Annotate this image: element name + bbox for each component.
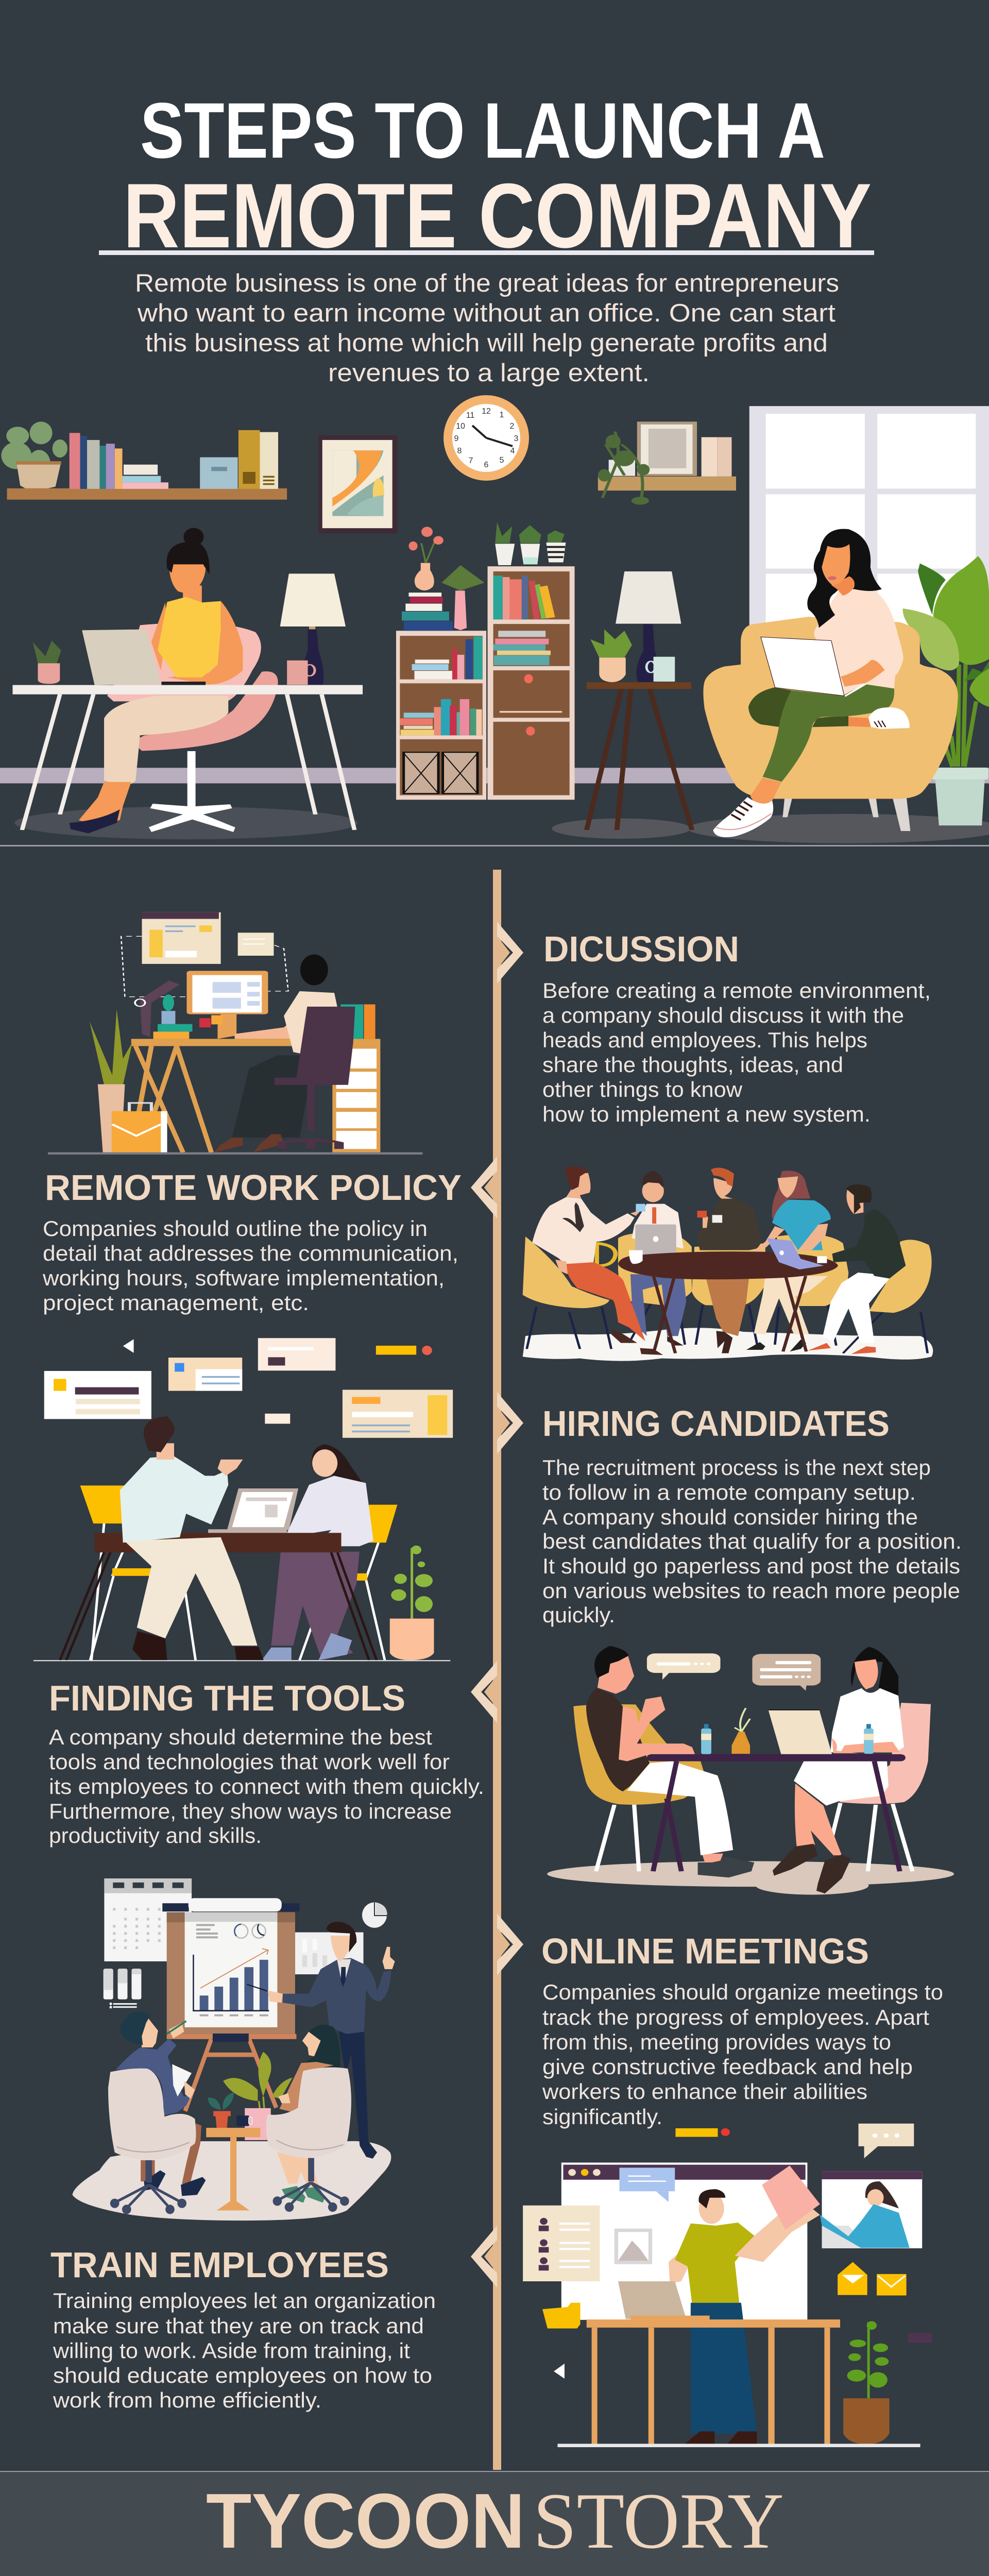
person 5 bbox=[808, 1184, 906, 1354]
desk bbox=[12, 630, 363, 830]
central vertical line bbox=[493, 870, 501, 2470]
illustration: online meeting bbox=[523, 2124, 932, 2447]
video call window bbox=[820, 2171, 922, 2248]
text: dicussion: Before creating a remote environment, bbox=[542, 978, 931, 1003]
text: dicussion: other things to know bbox=[542, 1077, 743, 1101]
bar icons bbox=[104, 1969, 141, 2008]
presenter bbox=[247, 1922, 395, 2159]
intro text: Remote business is one of the great ideas for entrepreneurs bbox=[135, 269, 839, 297]
notification bar bbox=[675, 2128, 730, 2137]
big plant bbox=[902, 556, 989, 825]
arrow icon bbox=[554, 2364, 565, 2379]
illustration: discussion group bbox=[523, 1166, 933, 1361]
woman at desk on chair bbox=[70, 528, 278, 834]
ground line bbox=[557, 2444, 920, 2447]
text: online meetings: from this, meeting provides ways to bbox=[542, 2030, 891, 2054]
clock: 11 bbox=[466, 411, 474, 420]
heading: hiring candidates: HIRING CANDIDATES bbox=[542, 1403, 890, 1444]
text: dicussion bbox=[542, 978, 931, 1126]
man with chair bbox=[573, 1646, 754, 1877]
clock bbox=[444, 395, 529, 481]
text: finding the tools: its employees to connect with them quickly. bbox=[49, 1774, 484, 1799]
intro text bbox=[135, 269, 839, 387]
text: online meetings: track the progress of employees. Apart bbox=[542, 2005, 929, 2029]
pink document bbox=[762, 2165, 820, 2230]
chairs bbox=[108, 2067, 351, 2214]
text: remote work policy: working hours, software implementation, bbox=[42, 1266, 445, 1290]
desk bbox=[587, 2303, 840, 2444]
contact card bbox=[523, 2206, 600, 2281]
chevron: online meetings bbox=[497, 1913, 523, 1975]
clock: 10 bbox=[456, 422, 465, 431]
horizontal divider bbox=[0, 845, 989, 846]
baseboard bbox=[0, 768, 989, 783]
text: dicussion: heads and employees. This helps bbox=[542, 1028, 867, 1052]
chevron: hiring candidates bbox=[497, 1392, 523, 1454]
heading: dicussion: DICUSSION bbox=[543, 929, 739, 969]
person 3 bbox=[696, 1167, 762, 1353]
text: finding the tools: A company should determine the best bbox=[49, 1725, 432, 1749]
man bbox=[120, 1416, 264, 1660]
heading: online meetings: ONLINE MEETINGS bbox=[541, 1931, 869, 1971]
chevron: remote work policy bbox=[471, 1157, 497, 1218]
right shelf with frame bbox=[598, 421, 736, 505]
desk lamp bbox=[280, 573, 346, 684]
illustration: person at desk bbox=[48, 912, 422, 1155]
text: online meetings: Companies should organize meetings to bbox=[542, 1980, 943, 2004]
woman bbox=[262, 1444, 373, 1660]
person 4 bbox=[740, 1171, 831, 1351]
text: hiring candidates: to follow in a remote company setup. bbox=[542, 1480, 916, 1504]
armchair bbox=[703, 617, 958, 831]
text: remote work policy: project management, etc. bbox=[43, 1291, 309, 1315]
plants, mug and table bbox=[206, 2052, 293, 2211]
interview table bbox=[647, 1708, 906, 1871]
envelope icons bbox=[838, 2262, 907, 2295]
standing man bbox=[669, 2189, 820, 2303]
window bbox=[749, 406, 989, 630]
text: finding the tools: Furthermore, they show ways to increase bbox=[49, 1799, 452, 1823]
rug bbox=[73, 2141, 391, 2221]
floor bbox=[547, 1861, 954, 1895]
hero illustration: home office bbox=[0, 406, 989, 843]
bookshelves bbox=[396, 566, 575, 800]
text: hiring candidates: The recruitment process is the next step bbox=[542, 1455, 931, 1480]
intro text: revenues to a large extent. bbox=[328, 359, 650, 387]
floor shadows bbox=[14, 806, 989, 843]
text: train employees: should educate employees on how to bbox=[53, 2363, 432, 2387]
clock: 5 bbox=[500, 456, 504, 465]
illustration: policy meeting with cards bbox=[33, 1338, 453, 1661]
flip chart bbox=[162, 1898, 299, 2111]
intro text: this business at home which will help generate profits and bbox=[145, 329, 828, 357]
chevron: train employees bbox=[471, 2226, 497, 2287]
clock: 8 bbox=[457, 447, 462, 455]
text: train employees: Training employees let an organization bbox=[53, 2289, 436, 2313]
footer band bbox=[0, 2471, 989, 2576]
text: hiring candidates: quickly. bbox=[542, 1603, 615, 1627]
text: remote work policy: Companies should outline the policy in bbox=[43, 1216, 428, 1241]
text: finding the tools: tools and technologies that work well for bbox=[49, 1750, 450, 1774]
illustration: training presentation bbox=[73, 1878, 395, 2221]
yellow chairs bbox=[523, 1233, 932, 1313]
laptop bbox=[618, 2281, 710, 2319]
rug bbox=[523, 1328, 933, 1361]
intro text: who want to earn income without an office. One can start bbox=[137, 299, 835, 327]
yellow folder bbox=[542, 2303, 581, 2329]
side table with lamp and plant bbox=[587, 571, 692, 830]
framed picture bbox=[318, 435, 397, 533]
clock: 3 bbox=[514, 434, 519, 443]
text: dicussion: how to implement a new system. bbox=[542, 1102, 871, 1126]
pie icon bbox=[362, 1902, 387, 1928]
clock: 6 bbox=[484, 461, 489, 469]
chevron: dicussion bbox=[497, 922, 523, 984]
woman with chair bbox=[773, 1647, 931, 1893]
clock: 1 bbox=[500, 411, 504, 419]
text: online meetings: workers to enhance their abilities bbox=[542, 2079, 867, 2104]
heading: remote work policy: REMOTE WORK POLICY bbox=[45, 1167, 462, 1208]
right seated woman bbox=[277, 2025, 340, 2202]
text: hiring candidates: best candidates that qualify for a position. bbox=[542, 1529, 962, 1553]
chair legs bbox=[527, 1303, 928, 1353]
plant bbox=[390, 1546, 434, 1660]
text: hiring candidates bbox=[542, 1455, 962, 1627]
left seated man bbox=[116, 2011, 206, 2196]
clock: 2 bbox=[510, 422, 515, 431]
chevron: finding the tools bbox=[471, 1661, 497, 1723]
illustration: hiring interview bbox=[547, 1646, 954, 1895]
screen window bbox=[561, 2163, 807, 2320]
text: train employees: work from home efficiently. bbox=[53, 2388, 321, 2412]
text: online meetings bbox=[542, 1980, 943, 2129]
left shelf with books and plant bbox=[1, 421, 287, 500]
clock: 4 bbox=[510, 447, 515, 455]
text: finding the tools bbox=[49, 1725, 484, 1848]
text: train employees: make sure that they are on track and bbox=[53, 2314, 424, 2338]
title: STEPS TO LAUNCH A bbox=[140, 87, 825, 175]
clock: 12 bbox=[482, 407, 491, 416]
clock: 7 bbox=[469, 456, 473, 465]
hero: big plant, armchair and seated woman with laptop bbox=[703, 529, 989, 837]
text: hiring candidates: A company should consider hiring the bbox=[542, 1505, 918, 1529]
heading: train employees: TRAIN EMPLOYEES bbox=[50, 2245, 389, 2285]
text: train employees: willing to work. Aside from training, it bbox=[53, 2338, 410, 2363]
title bbox=[99, 87, 874, 267]
text: online meetings: significantly. bbox=[542, 2105, 662, 2129]
text: online meetings: give constructive feedback and help bbox=[542, 2055, 913, 2079]
round table bbox=[618, 1238, 838, 1353]
text: remote work policy bbox=[42, 1216, 458, 1315]
text: hiring candidates: It should go paperless and post the details bbox=[542, 1554, 960, 1578]
footer band: STORY bbox=[533, 2477, 784, 2565]
clock: 9 bbox=[454, 434, 459, 443]
table and laptop bbox=[60, 1488, 377, 1660]
seated woman bbox=[713, 529, 910, 837]
potted plant bbox=[843, 2321, 890, 2444]
speech bubbles bbox=[647, 1653, 821, 1691]
small bar panel bbox=[295, 1933, 364, 1974]
speech bubble bbox=[859, 2124, 914, 2158]
yellow chairs bbox=[80, 1485, 397, 1660]
title: REMOTE COMPANY bbox=[123, 164, 872, 267]
text: train employees bbox=[53, 2289, 436, 2412]
text: dicussion: a company should discuss it with the bbox=[542, 1003, 904, 1027]
person 1 bbox=[532, 1166, 663, 1355]
calendar bbox=[104, 1878, 192, 1961]
text: hiring candidates: on various websites to reach more people bbox=[542, 1579, 960, 1603]
footer band: TYCOON bbox=[206, 2477, 525, 2564]
heading: finding the tools: FINDING THE TOOLS bbox=[49, 1678, 405, 1718]
text: dicussion: share the thoughts, ideas, and bbox=[542, 1053, 843, 1077]
person 2 bbox=[630, 1171, 686, 1346]
text: finding the tools: productivity and skills. bbox=[49, 1823, 262, 1848]
text: remote work policy: detail that addresses the communication, bbox=[43, 1241, 458, 1265]
small rectangle bbox=[908, 2333, 932, 2343]
shelf top decor: flowers, vases, plants and book stack bbox=[402, 522, 566, 631]
